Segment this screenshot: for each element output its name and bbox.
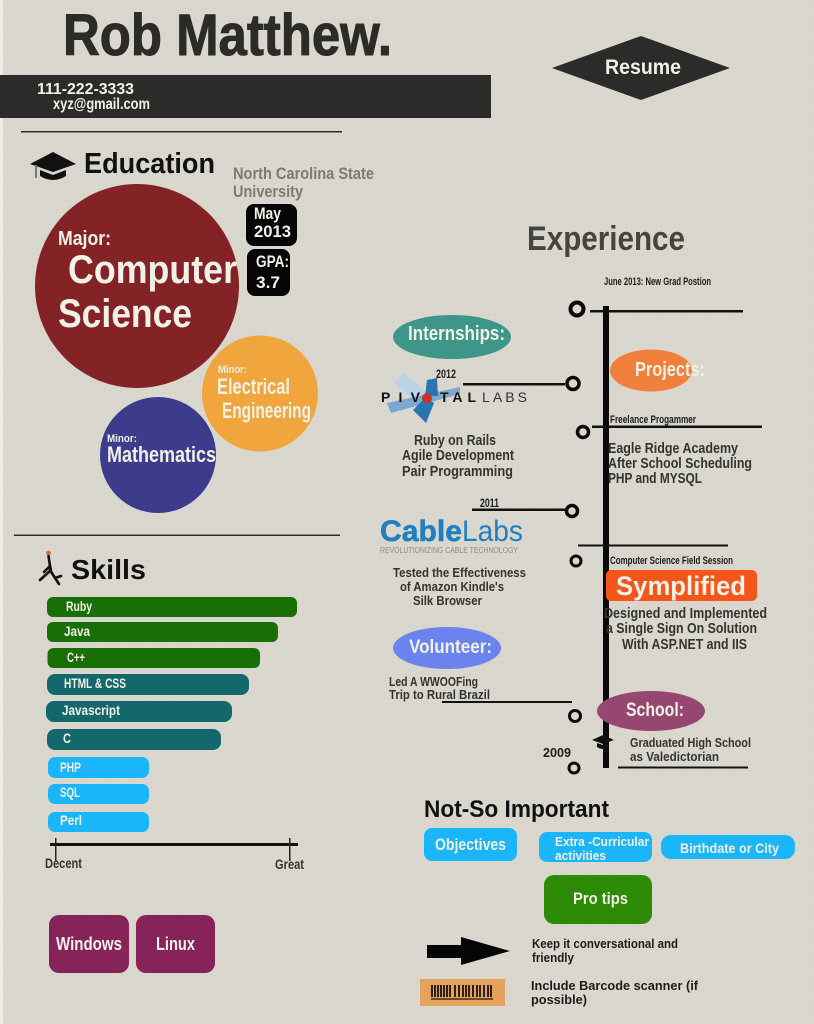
heading: education: Education: [84, 148, 215, 180]
timeline axis: [603, 306, 609, 768]
graduation date badge: 2013: [254, 222, 291, 241]
logo: CableLabs: [380, 515, 523, 555]
bar: PHP: [48, 757, 149, 778]
panel: experience: [380, 220, 767, 773]
GPA badge: [247, 249, 290, 296]
Pivotal Labs description: Ruby on Rails: [414, 432, 496, 449]
timeline entry: freelance programmer: Freelance Progammer: [610, 414, 697, 426]
bar: Ruby: [47, 597, 297, 617]
badge: Windows: Windows: [56, 934, 122, 954]
major circle: Major:: [58, 228, 111, 250]
bar: HTML and CSS: [47, 674, 249, 695]
CableLabs description: Tested the Effectiveness: [393, 565, 526, 580]
graduation date badge: [246, 204, 297, 246]
major circle: [35, 184, 239, 388]
tip: barcode scanner: Include Barcode scanner (if: [531, 978, 699, 993]
timeline entry: new grad position: [570, 276, 743, 316]
logo: Pivotal Labs: LABS: [482, 389, 527, 405]
school label: School:: [626, 700, 684, 721]
internships label: [393, 315, 511, 359]
timeline entry: freelance programmer: Eagle Ridge Academy: [608, 440, 739, 457]
Pivotal Labs description: Pair Programming: [402, 463, 513, 480]
bar: PHP: PHP: [60, 759, 81, 775]
phone number: 111-222-3333: [37, 81, 134, 98]
Pivotal Labs description: Agile Development: [402, 447, 514, 464]
bar: Perl: [48, 812, 149, 832]
resume badge: Resume: [605, 56, 681, 79]
logo: CableLabs: REVOLUTIONIZING CABLE TECHNOLOGY: [380, 546, 519, 555]
title: name: Rob Matthew.: [63, 3, 392, 68]
tag: objectives: [424, 828, 517, 861]
CableLabs description: [393, 565, 526, 608]
university name: [233, 164, 374, 201]
panel: education: [30, 148, 374, 513]
timeline entry: volunteer trip: Trip to Rural Brazil: [389, 687, 490, 702]
bar: SQL: [48, 784, 149, 804]
logo: CableLabs: Cable: [380, 515, 462, 548]
projects label: Projects:: [635, 359, 705, 381]
tip: barcode scanner: [531, 978, 699, 1007]
skill axis: Decent: [45, 855, 82, 871]
bar: Javascript: [46, 701, 232, 722]
university name: North Carolina State: [233, 164, 374, 183]
timeline entry: CableLabs: [380, 496, 578, 608]
tag: extra-curricular activities: [539, 832, 652, 863]
logo: Pivotal Labs: PIV: [381, 389, 421, 405]
bar: Java: [47, 622, 278, 642]
icon: arrow: [427, 937, 510, 965]
icon: graduation cap: [30, 152, 76, 180]
school label: [597, 691, 705, 731]
logo: Pivotal Labs: [381, 373, 527, 423]
bar: Javascript: Javascript: [62, 702, 120, 718]
logo: Symplified: Symplified: [616, 571, 746, 601]
icon: barcode: [420, 979, 505, 1006]
panel: skills: [40, 551, 304, 973]
badge: Windows: [49, 915, 129, 973]
Pivotal Labs description: [402, 432, 514, 480]
timeline entry: new grad position: June 2013: New Grad Postion: [604, 276, 711, 288]
timeline entry: Symplified field session: [571, 544, 767, 653]
pro tips badge: [544, 875, 652, 924]
email address: xyz@gmail.com: [53, 96, 150, 113]
bar: SQL: SQL: [60, 784, 80, 800]
CableLabs description: Silk Browser: [413, 593, 482, 608]
timeline entry: Pivotal Labs: [381, 367, 579, 480]
major circle: Science: [58, 292, 192, 336]
projects label: [610, 350, 705, 392]
timeline entry: freelance programmer: [578, 414, 762, 487]
timeline entry: Symplified field session: Computer Science Field Session: [610, 555, 733, 567]
tag: extra-curricular activities: activities: [555, 848, 606, 863]
bar: C++: [48, 648, 260, 668]
pro tips badge: Pro tips: [573, 889, 628, 908]
tip: conversational: [532, 936, 678, 965]
bar: HTML and CSS: HTML & CSS: [64, 675, 126, 691]
timeline entry: freelance programmer: After School Scheduling: [608, 455, 752, 472]
minor circle: electrical engineering: [202, 336, 318, 452]
major circle: Computer: [68, 248, 237, 292]
resume badge: [552, 36, 730, 100]
minor circle: electrical engineering: Electrical: [217, 374, 290, 399]
GPA badge: 3.7: [256, 273, 280, 292]
badge: Linux: Linux: [156, 934, 195, 954]
bar: Java: Java: [64, 623, 90, 639]
timeline entry: high school: as Valedictorian: [630, 749, 719, 764]
timeline entry: freelance programmer: PHP and MYSQL: [608, 470, 702, 487]
internships label: Internships:: [408, 323, 505, 345]
volunteer label: Volunteer:: [409, 637, 492, 658]
bar: C: C: [63, 730, 71, 746]
tip: conversational: Keep it conversational and: [532, 936, 678, 951]
heading: experience: Experience: [527, 220, 685, 258]
icon: small graduation cap: [592, 735, 614, 749]
badge: Linux: [136, 915, 215, 973]
volunteer label: [393, 627, 501, 669]
timeline entry: high school: Graduated High School: [630, 735, 751, 750]
skill axis: [45, 838, 304, 872]
tag: extra-curricular activities: Extra -Curricular: [555, 834, 649, 849]
minor circle: mathematics: Minor:: [107, 433, 137, 445]
minor circle: electrical engineering: Engineering: [222, 398, 311, 423]
minor circle: mathematics: Mathematics: [107, 442, 216, 467]
bar: C: [47, 729, 221, 750]
timeline entry: Symplified field session: With ASP.NET and IIS: [622, 636, 747, 653]
skill axis: Great: [275, 856, 304, 872]
tag: birthdate or city: [661, 835, 795, 859]
minor circle: electrical engineering: Minor:: [218, 364, 247, 376]
bar: Ruby: Ruby: [66, 598, 92, 614]
heading: not-so important: Not-So Important: [424, 796, 609, 823]
tip: barcode scanner: possible): [531, 992, 587, 1007]
timeline entry: high school: 2009: [543, 745, 571, 760]
icon: basketball player: [40, 551, 61, 584]
timeline entry: Symplified field session: a Single Sign On Solution: [606, 620, 757, 637]
GPA badge: GPA:: [256, 252, 289, 271]
logo: Pivotal Labs: TAL: [440, 389, 476, 405]
university name: University: [233, 182, 303, 201]
CableLabs description: of Amazon Kindle's: [400, 579, 504, 594]
timeline entry: volunteer trip: [389, 674, 580, 722]
minor circle: mathematics: [100, 397, 216, 513]
bar: Perl: Perl: [60, 812, 82, 828]
timeline entry: volunteer trip: Led A WWOOFing: [389, 674, 478, 689]
bar: C++: C++: [67, 649, 85, 665]
timeline entry: high school: [543, 735, 751, 773]
timeline entry: CableLabs: 2011: [480, 496, 499, 510]
graduation date badge: May: [254, 204, 281, 223]
timeline entry: Symplified field session: Designed and Implemented: [604, 605, 767, 622]
tag: objectives: Objectives: [435, 835, 506, 854]
contact bar: [0, 75, 491, 118]
timeline entry: Pivotal Labs: 2012: [436, 367, 456, 381]
heading: skills: Skills: [71, 554, 146, 585]
skill bars chart: [46, 597, 297, 832]
logo: CableLabs: Labs: [462, 515, 523, 548]
tip: conversational: friendly: [532, 950, 575, 965]
tag: birthdate or city: Birthdate or City: [680, 840, 779, 856]
panel: not-so important: [420, 796, 795, 1007]
